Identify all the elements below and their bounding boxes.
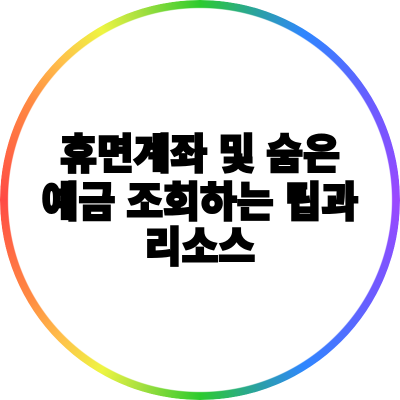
title line 3: 리소스 (145, 225, 255, 271)
title line 1: 휴면계좌 및 숨은 (60, 132, 340, 178)
title line 2: 예금 조회하는 팁과 (42, 180, 358, 226)
